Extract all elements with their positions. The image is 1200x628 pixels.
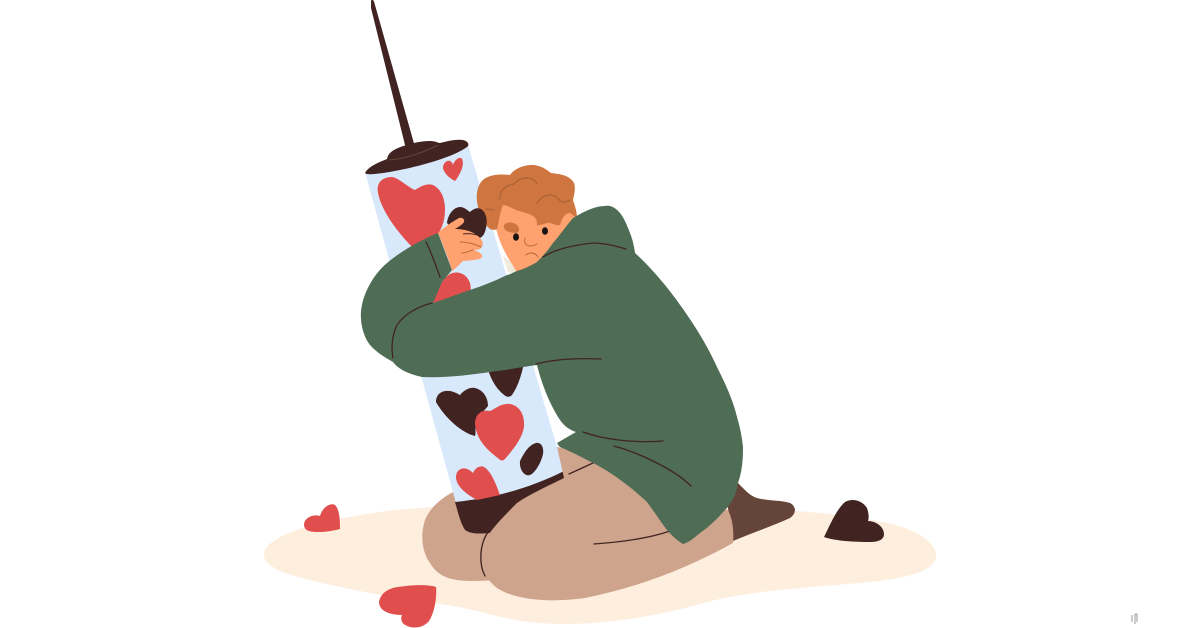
heart: small dark blob xyxy=(520,443,543,475)
syringe barrel xyxy=(365,145,565,503)
trouser: thigh xyxy=(481,447,733,600)
ear xyxy=(556,211,576,235)
eyes xyxy=(513,227,548,241)
back foot xyxy=(726,483,795,541)
neck collar xyxy=(503,256,522,276)
heart: red bottom xyxy=(456,466,500,500)
cap highlight line xyxy=(389,145,438,160)
hand xyxy=(438,218,483,271)
heart: dark mid xyxy=(487,362,524,397)
heart: dark lower xyxy=(436,388,488,436)
hair curl lines xyxy=(486,178,570,210)
watermark mark xyxy=(1132,614,1137,624)
face xyxy=(496,203,575,273)
person xyxy=(361,165,743,600)
plunger xyxy=(455,471,566,534)
heart: top large xyxy=(378,177,445,250)
barrel cap xyxy=(365,140,468,174)
eyebrow xyxy=(504,222,519,233)
jacket fold lines xyxy=(392,242,691,486)
trouser fold lines xyxy=(481,463,670,576)
nose and mouth xyxy=(525,238,538,257)
small heart: left on ground xyxy=(304,504,340,532)
syringe xyxy=(365,0,566,534)
needle xyxy=(371,0,415,149)
hair xyxy=(477,165,577,230)
heart: top small xyxy=(443,158,463,181)
broken heart: dark on ground xyxy=(824,500,884,542)
trouser: calf xyxy=(422,492,510,581)
green jacket xyxy=(361,206,743,544)
heart: behind arm xyxy=(430,272,471,306)
held heart xyxy=(447,207,487,238)
ground puddle xyxy=(264,503,936,624)
large heart: bottom on ground xyxy=(379,585,436,628)
heart: red center xyxy=(475,404,524,460)
finger lines xyxy=(460,242,481,253)
